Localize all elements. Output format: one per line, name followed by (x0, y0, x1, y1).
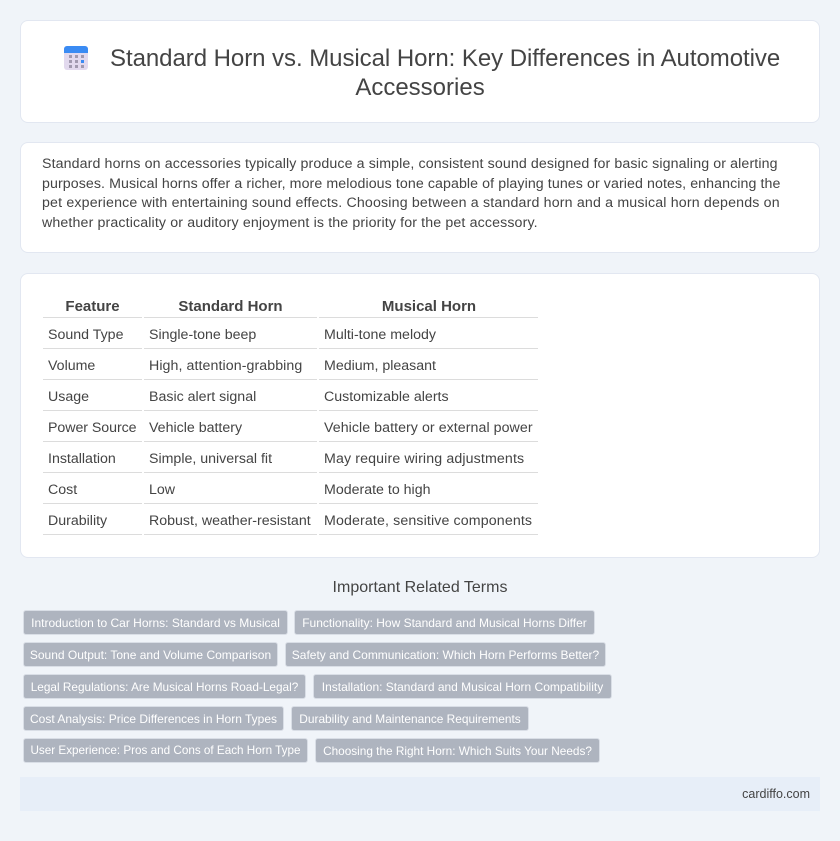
tag: Durability and Maintenance Requirements (299, 712, 521, 726)
row: sound type: Sound Type (48, 327, 123, 343)
tag (23, 706, 284, 731)
row: cost: Low (149, 482, 175, 498)
tag: Functionality: How Standard and Musical Horns Differ (302, 616, 587, 630)
intro text: purposes. Musical horns offer a richer, more melodious tone capable of playing tunes or varied notes, enhancing the (42, 176, 780, 192)
tag: Cost Analysis: Price Differences in Horn Types (30, 712, 277, 726)
row: installation: Simple, universal fit (149, 451, 272, 467)
row: installation: Installation (48, 451, 116, 467)
title: Standard Horn vs. Musical Horn: Key Differences in Automotive (110, 45, 780, 72)
tag: Installation: Standard and Musical Horn Compatibility (322, 680, 603, 694)
row: usage: Usage (48, 389, 89, 405)
tag: Legal Regulations: Are Musical Horns Road-Legal? (31, 680, 298, 694)
footer bar (20, 777, 820, 811)
table header row (43, 298, 538, 318)
row: sound type (43, 327, 538, 349)
icon: calendar grid (64, 46, 88, 70)
row: durability (43, 513, 538, 535)
row: usage: Customizable alerts (324, 389, 449, 405)
row: power source: Vehicle battery (149, 420, 242, 436)
tag list: related terms (23, 610, 612, 763)
tag (23, 642, 278, 667)
row: installation: May require wiring adjustments (324, 451, 524, 467)
row: power source: Power Source (48, 420, 137, 436)
title (110, 45, 780, 101)
row: volume: Volume (48, 358, 95, 374)
tag (23, 738, 308, 763)
row: durability: Moderate, sensitive components (324, 513, 532, 529)
row: sound type: Multi-tone melody (324, 327, 436, 343)
table header row: Standard Horn (178, 298, 283, 315)
row: volume (43, 358, 538, 380)
tag: Choosing the Right Horn: Which Suits Your Needs? (323, 744, 592, 758)
row: volume: High, attention-grabbing (149, 358, 302, 374)
row: sound type: Single-tone beep (149, 327, 256, 343)
panel: title header (20, 20, 820, 123)
tag: Sound Output: Tone and Volume Comparison (30, 648, 271, 662)
tag: Safety and Communication: Which Horn Performs Better? (292, 648, 599, 662)
tag (291, 706, 529, 731)
title: Accessories (355, 74, 485, 101)
row: cost: Moderate to high (324, 482, 430, 498)
row: cost (43, 482, 538, 504)
footer source: cardiffo.com (742, 787, 810, 801)
panel: comparison table (20, 273, 820, 558)
row: usage (43, 389, 538, 411)
panel: introduction (20, 142, 820, 253)
tag (285, 642, 606, 667)
tag (313, 674, 612, 699)
tag (294, 610, 595, 635)
row: power source: Vehicle battery or external power (324, 420, 533, 436)
intro text: Standard horns on accessories typically produce a simple, consistent sound designed for basic signaling or alerting (42, 156, 778, 172)
table header row: Musical Horn (382, 298, 476, 315)
row: installation (43, 451, 538, 473)
tag (23, 610, 288, 635)
intro text (42, 156, 780, 231)
intro text: whether practicality or auditory enjoyment is the priority for the pet accessory. (42, 215, 538, 231)
row: durability: Durability (48, 513, 107, 529)
intro text: pet experience with entertaining sound effects. Choosing between a standard horn and a musical horn depends on (42, 195, 780, 211)
tag (315, 738, 600, 763)
heading: important related terms: Important Related Terms (333, 579, 507, 596)
row: power source (43, 420, 538, 442)
row: volume: Medium, pleasant (324, 358, 436, 374)
row: durability: Robust, weather-resistant (149, 513, 311, 529)
table header row: Feature (65, 298, 120, 315)
tag: User Experience: Pros and Cons of Each Horn Type (30, 744, 301, 757)
row: cost: Cost (48, 482, 77, 498)
tag (23, 674, 306, 699)
tag: Introduction to Car Horns: Standard vs Musical (31, 616, 280, 630)
row: usage: Basic alert signal (149, 389, 256, 405)
